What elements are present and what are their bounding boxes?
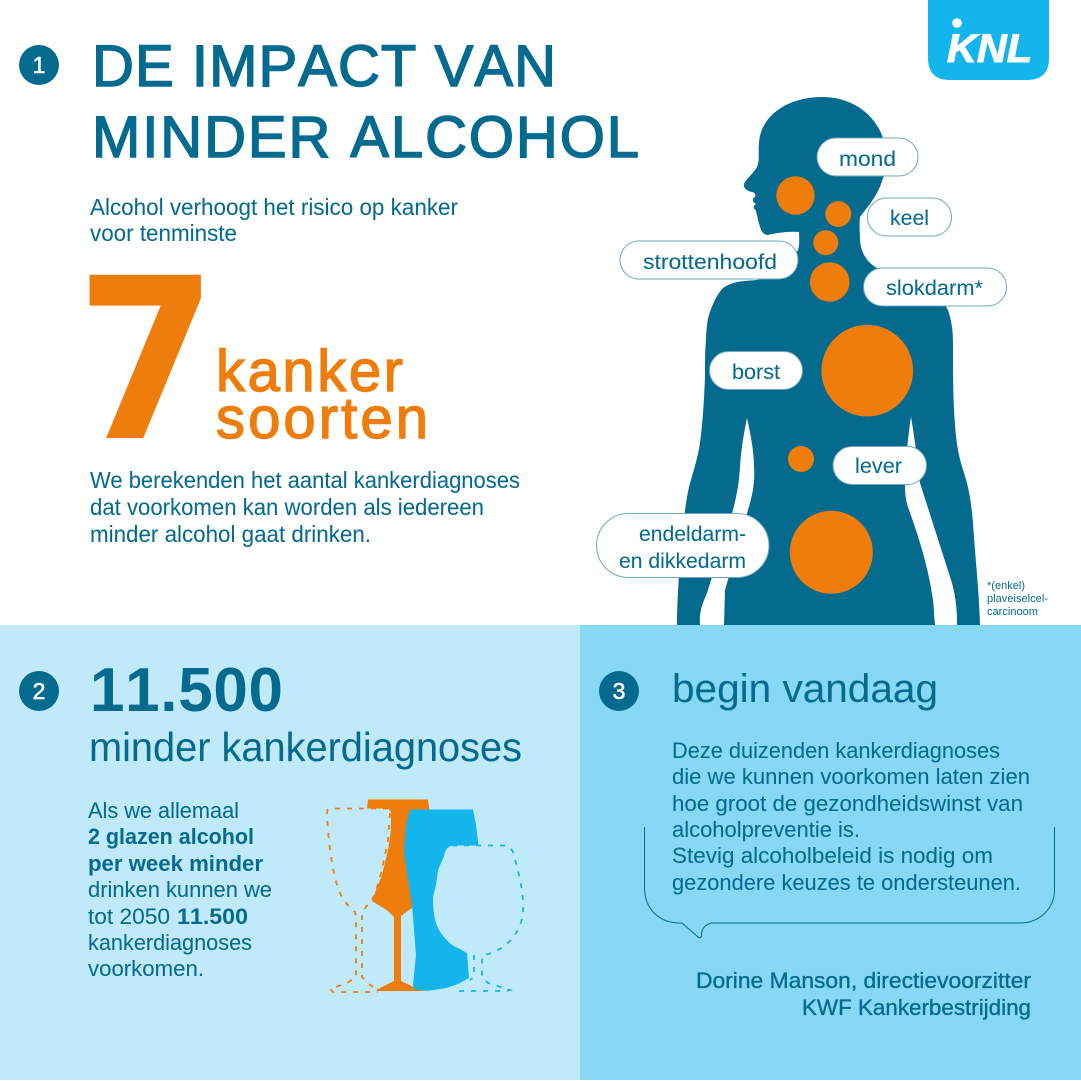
footnote: plaveiselcel-	[987, 593, 1048, 605]
label: borst	[710, 352, 802, 390]
text block: glasses explanation: 11.500	[177, 904, 248, 929]
heading: 11.500: 11.500	[90, 656, 283, 725]
title: MINDER ALCOHOL	[92, 105, 639, 170]
number badge 3	[599, 671, 639, 711]
label: mond	[817, 138, 918, 176]
label: endeldarm en dikkedarm: endeldarm-	[639, 523, 746, 546]
label: keel: keel	[890, 207, 929, 230]
big number 7: 7	[76, 230, 217, 491]
quote text: die we kunnen voorkomen laten zien	[672, 764, 1030, 789]
footnote: *(enkel)	[987, 580, 1025, 592]
quote text: Deze duizenden kankerdiagnoses	[672, 738, 1000, 763]
label: slokdarm	[864, 268, 1006, 306]
label: endeldarm en dikkedarm	[596, 514, 769, 578]
quote text: hoe groot de gezondheidswinst van	[672, 791, 1023, 816]
intro text	[90, 194, 458, 246]
label: strottenhoofd	[620, 241, 798, 279]
label: endeldarm en dikkedarm: en dikkedarm	[619, 550, 746, 573]
label: borst: borst	[732, 361, 780, 384]
explanation text: dat voorkomen kan worden als iedereen	[90, 494, 484, 520]
number badge 3: 3	[613, 678, 625, 704]
text block: glasses explanation	[88, 798, 272, 981]
heading: kanker soorten: kanker	[216, 339, 403, 404]
attribution	[696, 968, 1031, 1020]
panel: blue begin vandaag section	[580, 625, 1081, 1080]
text block: glasses explanation: 2 glazen alcohol	[88, 824, 254, 849]
intro text: voor tenminste	[90, 220, 237, 246]
speech bubble outline	[644, 827, 1054, 938]
attribution: Dorine Manson, directievoorzitter	[696, 968, 1031, 993]
arm gap right	[905, 417, 957, 625]
footnote: carcinoom	[987, 606, 1038, 618]
text block: glasses explanation: Als we allemaal	[88, 798, 239, 823]
quote text: alcoholpreventie is.	[672, 817, 860, 842]
number badge 1	[19, 45, 59, 85]
quote text	[672, 738, 1030, 895]
heading: kanker soorten	[216, 339, 428, 451]
tumour circles	[776, 176, 913, 594]
text block: glasses explanation: voorkomen.	[88, 956, 204, 981]
arm gap left	[700, 418, 754, 625]
footnote	[987, 580, 1048, 618]
attribution: KWF Kankerbestrijding	[802, 995, 1031, 1020]
subheading: minder kankerdiagnoses: minder kankerdiagnoses	[89, 724, 522, 770]
explanation text: minder alcohol gaat drinken.	[90, 521, 371, 547]
label: slokdarm: slokdarm*	[886, 277, 983, 300]
number badge 2	[19, 671, 59, 711]
logo: KNL	[928, 0, 1049, 80]
panel: light blue 11.500 section	[0, 625, 580, 1080]
explanation text	[90, 467, 520, 547]
intro text: Alcohol verhoogt het risico op kanker	[90, 194, 458, 220]
icon: alcohol glasses	[327, 800, 523, 992]
quote text: Stevig alcoholbeleid is nodig om	[672, 843, 993, 868]
explanation text: We berekenden het aantal kankerdiagnoses	[90, 467, 520, 493]
label: lever	[833, 446, 926, 484]
title	[92, 34, 639, 170]
text block: glasses explanation: per week minder	[88, 851, 263, 876]
body silhouette	[677, 97, 980, 625]
number badge 1: 1	[33, 52, 45, 78]
title: DE IMPACT VAN	[92, 34, 556, 99]
heading: begin vandaag: begin vandaag	[672, 667, 938, 711]
heading: kanker soorten: soorten	[216, 386, 428, 451]
text block: glasses explanation: kankerdiagnoses	[88, 930, 252, 955]
label: keel	[868, 198, 952, 236]
number badge 2: 2	[33, 678, 45, 704]
text block: glasses explanation: drinken kunnen we	[88, 877, 272, 902]
quote text: gezondere keuzes te ondersteunen.	[672, 870, 1021, 895]
text block: glasses explanation: tot 2050	[88, 904, 170, 929]
label: mond: mond	[839, 148, 896, 171]
panel: white top background	[0, 0, 1081, 625]
logo: KNL: KNL	[947, 27, 1032, 71]
label: lever: lever	[855, 455, 902, 478]
label: strottenhoofd: strottenhoofd	[643, 251, 777, 274]
